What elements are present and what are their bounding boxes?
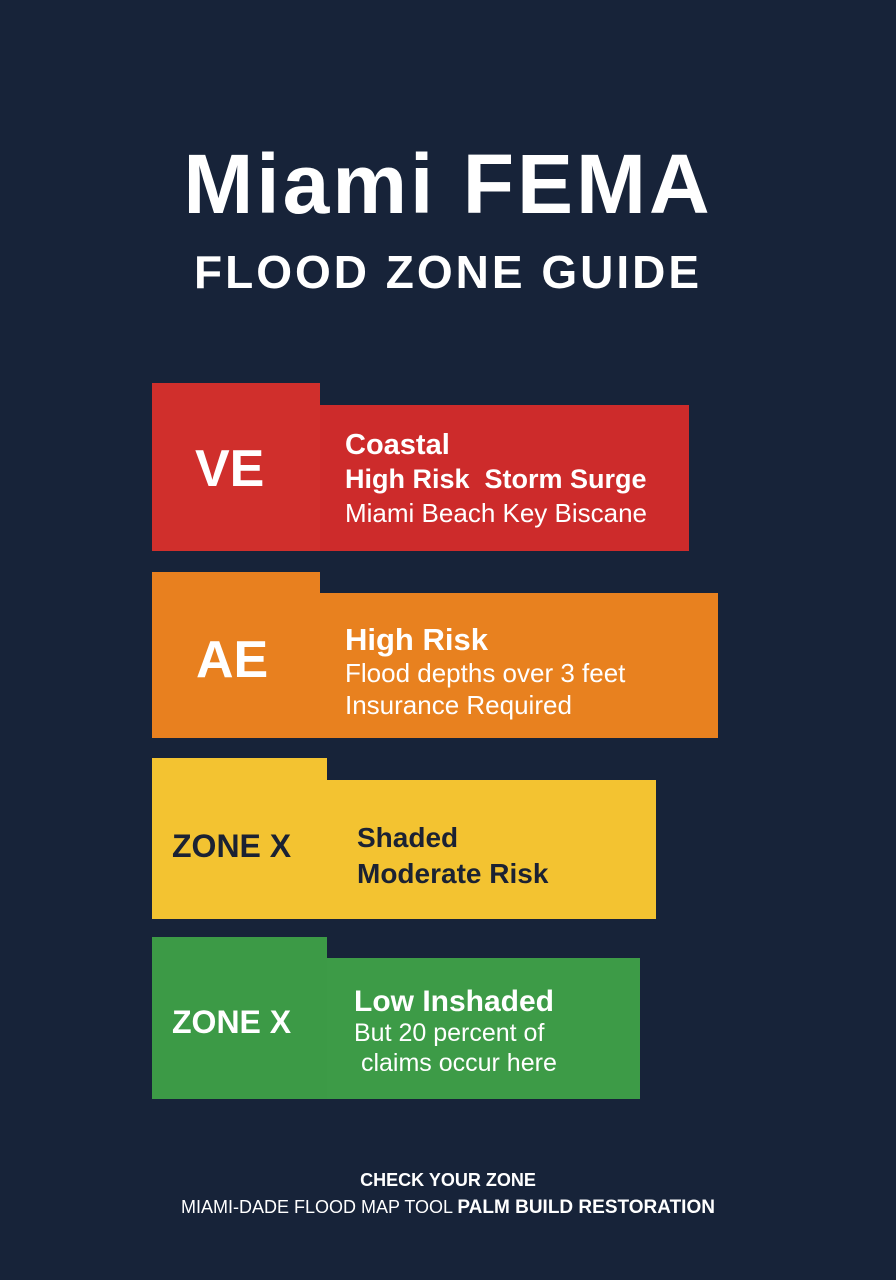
title: Miami FEMA (183, 137, 713, 231)
subtitle: FLOOD ZONE GUIDE (194, 246, 702, 298)
text shaded (357, 822, 548, 889)
text AE: High Risk (345, 622, 488, 657)
text unshaded: claims occur here (361, 1049, 557, 1077)
text AE: Insurance Required (345, 690, 572, 720)
text VE: Miami Beach Key Biscane (345, 498, 647, 528)
text unshaded: Low Inshaded (354, 985, 554, 1018)
label zone X green: ZONE X (172, 1004, 291, 1040)
footer (181, 1170, 715, 1218)
panel: VE (152, 383, 689, 551)
text VE (345, 429, 647, 528)
text AE (345, 622, 626, 720)
label zone X: ZONE X (172, 828, 291, 864)
text AE: Flood depths over 3 feet (345, 658, 625, 688)
text shaded: Moderate Risk (357, 858, 548, 889)
panel: AE (152, 572, 718, 738)
panel: shaded zone X (152, 758, 656, 919)
label AE: AE (196, 631, 268, 689)
footer: MIAMI-DADE FLOOD MAP TOOL PALM BUILD RESTORATION (181, 1197, 715, 1218)
text unshaded (354, 985, 557, 1077)
text VE: High Risk Storm Surge (345, 464, 647, 494)
text shaded: Shaded (357, 822, 458, 853)
footer: CHECK YOUR ZONE (360, 1170, 536, 1190)
text VE: Coastal (345, 429, 450, 461)
label VE: VE (195, 440, 264, 498)
text unshaded: But 20 percent of (354, 1019, 544, 1047)
panel: unshaded zone X (152, 937, 640, 1099)
